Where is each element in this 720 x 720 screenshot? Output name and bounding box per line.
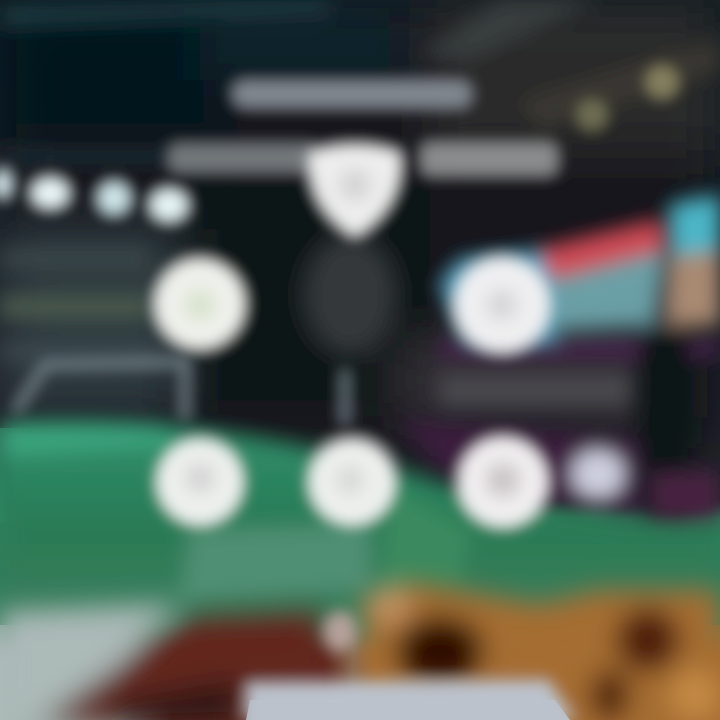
icon circle: bottom left (156, 438, 244, 526)
advertising boards (400, 420, 720, 520)
icon circle: bottom right (457, 436, 549, 528)
icon glyphs inside circles (186, 170, 519, 496)
icon circle: top centre (309, 144, 401, 238)
icon circle: middle right (454, 257, 550, 353)
centre haze (302, 233, 398, 357)
title bar: first line (232, 80, 472, 108)
roof beams (0, 0, 720, 405)
big screen (440, 195, 720, 520)
foreground: table and food (0, 582, 720, 720)
pitch (0, 421, 720, 640)
icon circle: bottom centre (308, 438, 396, 526)
white panel at bottom (244, 680, 575, 720)
background: stadium upper stands (0, 0, 720, 460)
icon circle: middle left (154, 258, 246, 350)
title bar: second line (168, 142, 558, 176)
small plate highlight (324, 612, 356, 652)
goal post (15, 362, 345, 425)
stadium lights (0, 65, 679, 222)
